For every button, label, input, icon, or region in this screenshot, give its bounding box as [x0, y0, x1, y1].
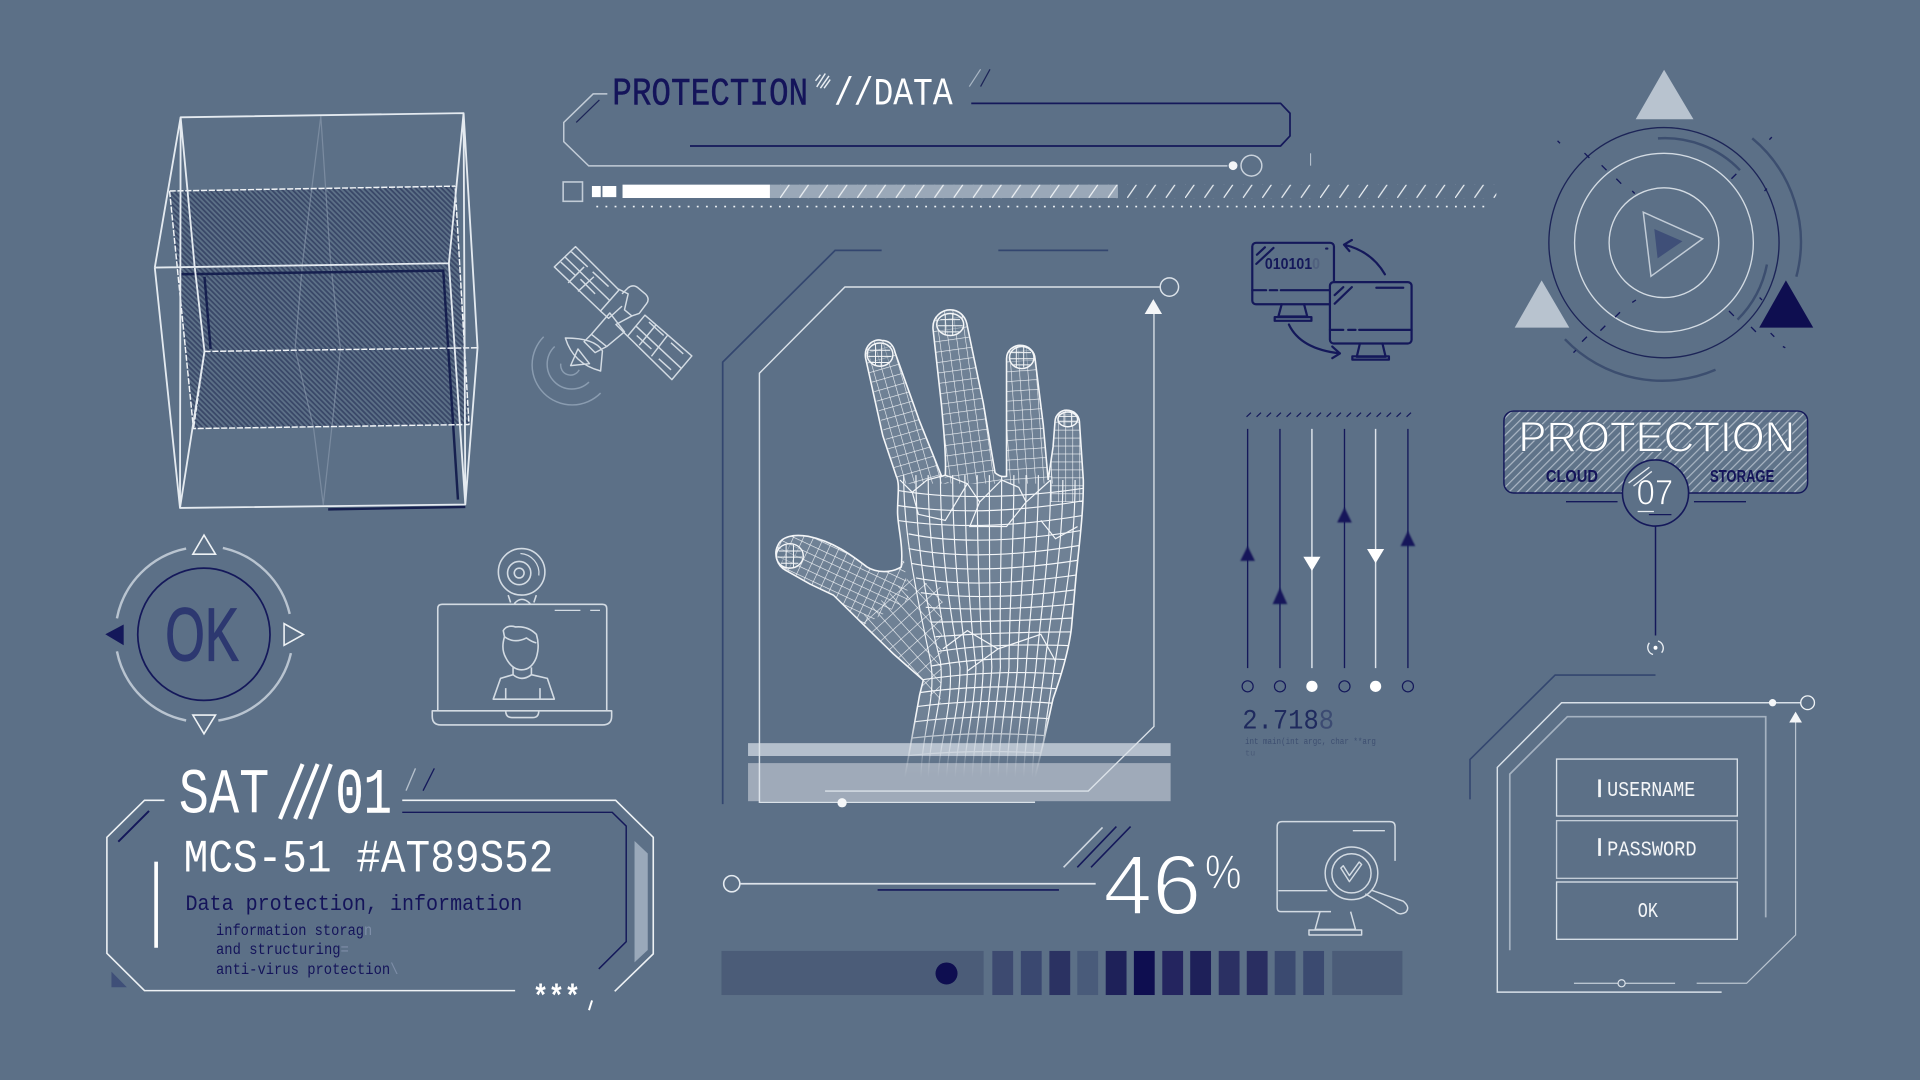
monitor back [1252, 243, 1334, 304]
white sliders [1303, 549, 1384, 571]
subtitle: Data protection, information [186, 892, 522, 917]
thenar grid [860, 578, 943, 704]
panel navy inner line [402, 812, 626, 969]
navy slashes [1077, 827, 1131, 867]
satellite hub [618, 286, 648, 316]
mid circle [1575, 153, 1753, 332]
small blocks [592, 186, 616, 197]
right navy triangle [1759, 280, 1813, 328]
navy frame line [723, 250, 1108, 804]
grey slash [406, 768, 415, 791]
person body [493, 667, 554, 699]
heading: protection data panel [564, 69, 1311, 176]
filled segment [623, 185, 770, 198]
icon: satellite [532, 247, 692, 405]
ok label: OK [1638, 900, 1658, 924]
number white underline [1638, 510, 1654, 512]
password field [1557, 821, 1737, 878]
code line 2: tu [1245, 749, 1255, 759]
ring finger grid [1004, 340, 1053, 484]
grey side tab [635, 841, 648, 962]
target dot [1654, 646, 1657, 650]
monitor back details [1252, 247, 1333, 321]
down triangle [193, 715, 216, 734]
fingertip nails [776, 313, 1078, 568]
navy underline [878, 889, 1059, 891]
right segment [1332, 951, 1402, 995]
white frame line [759, 287, 1160, 802]
cube solid edges [155, 113, 478, 508]
hand clipped mesh [777, 310, 1082, 772]
triple slash [280, 764, 331, 819]
frame bottom dot [837, 798, 847, 807]
magnifier handle [1365, 890, 1408, 914]
username label: USERNAME [1607, 779, 1695, 803]
frame ring [1160, 278, 1179, 296]
outer circle [1549, 128, 1779, 358]
chip title: MCS-51 #AT89S52 [184, 833, 553, 886]
segmented bar [721, 951, 1402, 995]
nail grid lines [778, 313, 1078, 567]
badge title: PROTECTION [1518, 414, 1795, 462]
top triangle [1636, 70, 1693, 119]
dial ring [138, 568, 270, 700]
magnifier inner [1332, 854, 1371, 893]
gauge ring [724, 876, 740, 892]
play outline [1643, 212, 1703, 276]
number: 07 [1637, 472, 1673, 512]
open dots [1242, 681, 1413, 692]
heading text navy: PROTECTION [612, 72, 808, 117]
OK text: OK [165, 593, 239, 677]
radar ticks [1558, 137, 1785, 353]
satellite body [584, 313, 624, 353]
thumb grid [777, 536, 908, 624]
wireframe cube [155, 113, 478, 509]
cube faint centre folds [295, 116, 340, 504]
play fill [1654, 229, 1682, 258]
navy tracks [1248, 429, 1408, 668]
small slashes [969, 69, 981, 87]
screen marks [555, 609, 600, 611]
frame dot [1769, 699, 1776, 706]
value 46: 46 [1103, 838, 1201, 932]
text line 2: and structuring= [216, 941, 349, 959]
outline square [563, 182, 582, 201]
code line: int main(int argc, char **arg [1245, 736, 1376, 747]
01 label: 01 [336, 760, 392, 832]
navy sliders [1240, 508, 1415, 604]
grey bracket outline [564, 94, 1227, 166]
binary text: 0101010 [1265, 256, 1320, 273]
heading text white: //DATA [834, 72, 953, 117]
corner triangle [111, 972, 127, 987]
checkmark [1341, 862, 1362, 882]
icon: monitor with magnifier [1277, 822, 1408, 935]
SAT label: SAT [179, 760, 269, 832]
satellite panel lower [628, 315, 692, 380]
dish feed [571, 349, 589, 366]
left triangle [105, 624, 124, 645]
text line 3: anti-virus protection\ [216, 961, 398, 979]
indicator dot [936, 962, 958, 984]
navy frame [1470, 675, 1656, 799]
progress bar [563, 182, 1496, 207]
index finger grid [866, 341, 949, 484]
badge box [1504, 411, 1808, 493]
number slashes [1629, 467, 1652, 486]
frame right line [825, 314, 1154, 791]
satellite connectors [600, 306, 632, 336]
password cursor [1598, 838, 1601, 856]
icon: two monitors exchange [1252, 240, 1412, 360]
cube hatched plane [170, 186, 469, 429]
left segment [721, 951, 984, 995]
left triangle [1515, 280, 1569, 328]
panel: wireframe hand [723, 250, 1179, 807]
navy small slash [981, 69, 990, 87]
filled dots [1306, 681, 1381, 692]
monitor front [1330, 282, 1412, 343]
monitor front details [1330, 287, 1412, 360]
asterisks: *** [533, 981, 580, 1017]
bottom slider [1574, 982, 1675, 984]
diagonal ticks [771, 185, 1496, 198]
person head [503, 626, 538, 670]
arrow bottom [1289, 324, 1340, 358]
signal waves [532, 337, 601, 405]
slider end ring [1241, 155, 1262, 176]
number navy underline [1649, 514, 1671, 516]
panel: login [1470, 675, 1814, 992]
frame arrow [1145, 299, 1162, 314]
laptop screen [438, 604, 607, 711]
frame ring [1801, 696, 1814, 710]
white frame [1497, 703, 1801, 992]
dotted line [596, 206, 1489, 208]
webcam body [498, 549, 545, 595]
cube dashed edges [170, 186, 478, 429]
grey inner frame [1510, 717, 1766, 950]
navy bracket outline [690, 103, 1290, 146]
number circle [1622, 460, 1689, 526]
webcam glint [520, 553, 539, 576]
white slash [1064, 827, 1103, 867]
satellite dish [565, 338, 602, 371]
up triangle [193, 535, 216, 554]
lower light bar [748, 763, 1171, 801]
slider end dot [1229, 161, 1237, 170]
webcam pupil [514, 568, 524, 578]
magnifier [1325, 847, 1378, 900]
monitor body [1277, 822, 1395, 912]
text line 1: information storagn [216, 922, 372, 940]
cloud label: CLOUD [1546, 466, 1598, 486]
stem line [1655, 526, 1657, 636]
knuckle facets [900, 475, 1078, 671]
navy slash [118, 811, 149, 842]
value: 2.7188 [1242, 707, 1334, 738]
white tracks [1312, 429, 1376, 668]
little finger grid [1050, 411, 1082, 502]
username cursor [1598, 779, 1601, 797]
right triangle [284, 624, 303, 645]
monitor stand [1309, 912, 1362, 935]
palm cross contours [889, 487, 1090, 757]
inner circle [1609, 188, 1719, 298]
small tick [1310, 153, 1312, 166]
slider chart [1240, 413, 1415, 759]
storage label: STORAGE [1710, 466, 1774, 486]
hatch mark [816, 73, 830, 88]
stripes [992, 951, 1324, 995]
webcam [508, 595, 536, 604]
gauge line [740, 883, 1096, 885]
dial arcs [117, 548, 291, 720]
frame arrow [1789, 712, 1802, 722]
panel white outline [107, 800, 653, 991]
white vertical bar [154, 862, 158, 948]
badge: protection cloud storage [1504, 411, 1808, 654]
tick row [1247, 413, 1411, 417]
ok button [1557, 882, 1737, 939]
bottom slider knob [1618, 980, 1625, 987]
radar arcs [1565, 138, 1801, 381]
badge side lines [1566, 501, 1746, 503]
middle finger grid [931, 306, 1002, 484]
cube navy inner edges [181, 271, 465, 509]
target [1648, 641, 1663, 654]
gauge: 46 percent [724, 827, 1242, 932]
comma mark [589, 1000, 592, 1010]
hand translucent fill [777, 310, 1082, 743]
palm longitudinal lines [904, 475, 1075, 784]
upper light bar [748, 743, 1171, 756]
arrow top [1344, 240, 1385, 274]
navy accent slash [576, 100, 599, 122]
hand mesh [775, 309, 1084, 772]
panel: SAT 01 [107, 760, 653, 1017]
laptop base [432, 711, 612, 725]
right frame line [1697, 722, 1796, 983]
satellite panel upper [554, 247, 619, 311]
icon: OK dial [105, 535, 303, 734]
username field [1557, 759, 1737, 816]
password label: PASSWORD [1607, 838, 1697, 862]
navy slash top [423, 768, 434, 791]
icon: laptop with webcam [432, 549, 612, 725]
webcam lens [508, 561, 531, 585]
hand outline [776, 310, 1083, 784]
percent sign: % [1205, 846, 1242, 899]
icon: play radar [1515, 70, 1813, 381]
translucent segment [770, 185, 1118, 198]
